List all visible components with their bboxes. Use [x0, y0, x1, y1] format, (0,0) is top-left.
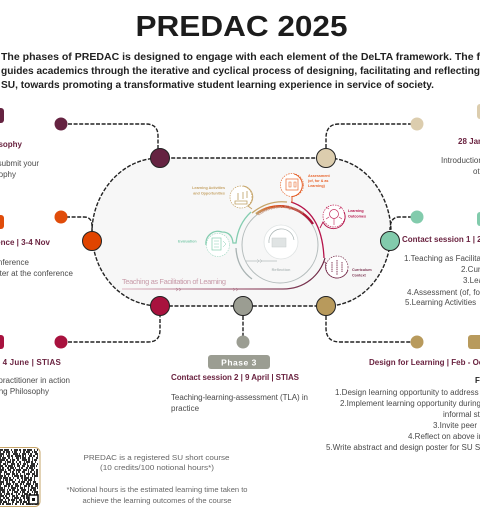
constructive alignment arc: Constructive alignment — [258, 205, 304, 216]
inner ring — [242, 207, 318, 283]
framework diagram — [122, 173, 372, 292]
learning track with label — [122, 258, 325, 291]
reflection: Reflection — [272, 267, 291, 272]
reflection — [246, 225, 298, 272]
dashed track — [92, 158, 391, 306]
curriculum context: Context — [352, 274, 366, 278]
contact session 3 text — [0, 358, 70, 396]
course note: PREDAC is a registered SU short course — [84, 453, 230, 462]
phase 3 pill — [208, 355, 270, 369]
connectors to outer nodes — [66, 124, 413, 342]
title: PREDAC 2025 — [136, 11, 348, 43]
phase 1 left text — [0, 140, 39, 179]
track nodes — [82, 148, 400, 316]
contact session 1 text — [402, 235, 480, 307]
QR code — [0, 448, 40, 506]
contact session 2 text: Contact session 2 | 9 April | STIAS — [171, 373, 300, 382]
learning outcomes — [320, 205, 366, 229]
intro text — [1, 52, 480, 91]
curriculum context: Curriculum — [352, 268, 372, 272]
intro text: guides academics through the iterative and cyclical process of designing, facilitating and reflecting — [1, 66, 480, 77]
course note: achieve the learning outcomes of the course — [82, 496, 232, 505]
phase 1 right text — [441, 137, 480, 176]
learning activities: and Opportunities — [193, 192, 225, 196]
curriculum context — [324, 256, 372, 278]
learning outcomes: Outcomes — [348, 214, 366, 218]
course note — [66, 453, 248, 505]
design for learning text: 3.Invite peer — [433, 421, 477, 430]
design for learning text: 1.Design learning opportunity to address — [335, 388, 479, 397]
outer ring arcs — [206, 202, 324, 279]
course note: *Notional hours is the estimated learning time taken to — [66, 485, 248, 494]
design for learning text — [326, 358, 480, 452]
contact session 2 text — [171, 373, 308, 413]
conference text — [0, 238, 74, 278]
contact session 1 text: 5.Learning Activities — [405, 298, 476, 307]
evaluation: Evaluation — [178, 240, 197, 244]
design for learning text: 2.Implement learning opportunity during — [340, 399, 480, 408]
learning activities: Learning Activities — [192, 186, 225, 190]
assessment — [280, 174, 330, 203]
phase pills — [0, 104, 480, 349]
outer nodes — [54, 118, 424, 348]
assessment: Assessment — [308, 174, 330, 178]
phase 3 pill: Phase 3 — [221, 358, 257, 368]
intro text: SU, towards promoting a transformative student learning experience in service of society. — [1, 80, 434, 91]
learning outcomes: Learning — [348, 209, 364, 213]
learning activities — [192, 186, 253, 209]
intro text: The phases of PREDAC is designed to engage with each element of the DeLTA framework. The f — [1, 52, 480, 63]
course note: (10 credits/100 notional hours*) — [100, 463, 214, 472]
contact session 2 text: practice — [171, 404, 200, 413]
design for learning text: F — [475, 376, 480, 385]
assessment: Learning) — [308, 184, 326, 188]
assessment: (of, for & as — [308, 179, 328, 183]
constructive alignment arc — [255, 205, 314, 224]
learning track with label: Teaching as Facilitation of Learning — [122, 277, 226, 286]
evaluation — [178, 234, 230, 256]
central track panel — [92, 158, 391, 306]
contact session 2 text: Teaching-learning-assessment (TLA) in — [171, 393, 308, 402]
